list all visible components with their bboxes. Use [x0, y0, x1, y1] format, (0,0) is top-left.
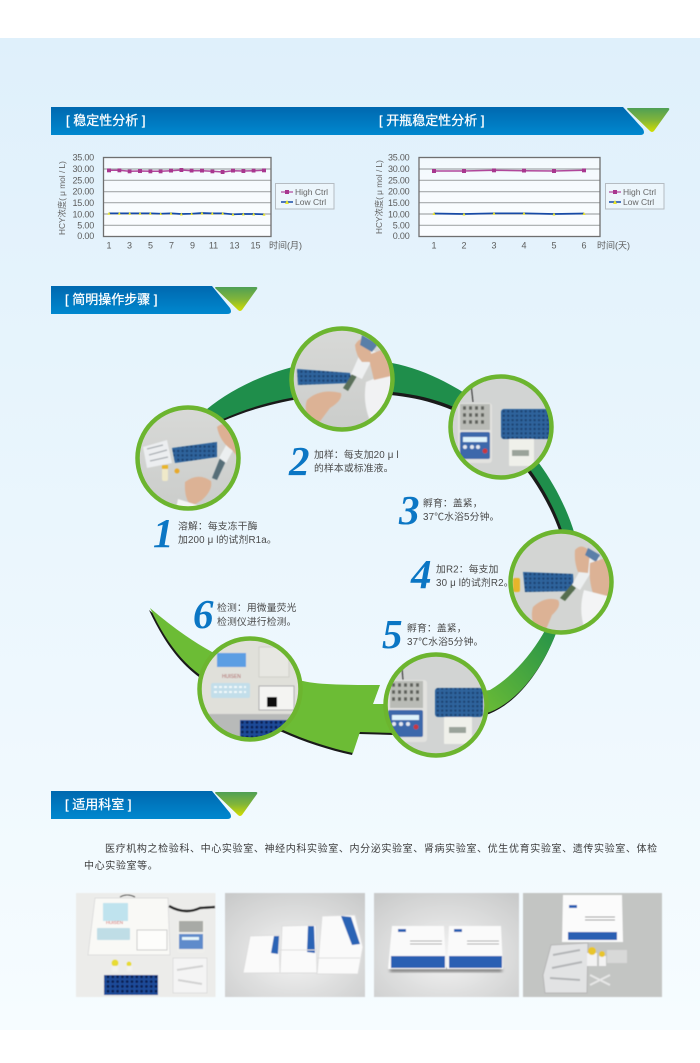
chart: opened-vial stability over days: 5.00 [393, 220, 410, 230]
chart: stability over months: 13 [229, 240, 240, 250]
chart: opened-vial stability over days: 30.00 [388, 164, 410, 174]
chart: stability over months [57, 152, 334, 250]
product photo: kit boxes front [374, 893, 519, 997]
step 1 text: 加200 μ l的试剂R1a。 [178, 533, 277, 546]
legend [606, 184, 664, 209]
chart: opened-vial stability over days: 1 [431, 240, 437, 250]
chart: stability over months: 时间(月) [269, 240, 302, 250]
chart: opened-vial stability over days: HCY浓度( μ mol / L) [374, 160, 384, 234]
step 4 text: 加R2：每支加 [436, 562, 499, 576]
product photo: instrument set: HUISEN [106, 920, 123, 925]
departments paragraph: 中心实验室等。 [84, 859, 158, 872]
chart: stability over months: 1 [106, 240, 112, 250]
chart: opened-vial stability over days: 4 [521, 240, 527, 250]
photo circle: step 5 incubation [386, 654, 486, 756]
section header: stability analysis: [ 稳定性分析 ] [66, 113, 145, 128]
departments paragraph: 医疗机构之检验科、中心实验室、神经内科实验室、内分泌实验室、肾病实验室、优生优育实验室、遗传实验室、体检 [105, 842, 658, 855]
legend: High Ctrl [295, 187, 328, 197]
icon: triangle accent [627, 108, 669, 132]
product photo: instrument set [76, 893, 216, 997]
chart: opened-vial stability over days: 25.00 [388, 176, 410, 186]
chart: stability over months: 3 [127, 240, 132, 250]
section header: applicable departments [51, 791, 257, 819]
icon: triangle accent [215, 792, 257, 816]
chart: stability over months: 10.00 [72, 210, 94, 220]
product photo: kit contents [523, 893, 662, 997]
step 4 text [410, 551, 514, 597]
step 3 text [398, 487, 499, 533]
chart: opened-vial stability over days: 15.00 [388, 198, 410, 208]
step 2 text: 的样本或标准液。 [314, 462, 394, 474]
legend: Low Ctrl [295, 197, 326, 207]
chart: stability over months: 30.00 [72, 164, 94, 174]
chart: opened-vial stability over days: 2 [461, 240, 467, 250]
step 3 text: 孵育：盖紧， [423, 496, 483, 510]
chart: opened-vial stability over days: 5 [551, 240, 557, 250]
legend: Low Ctrl [623, 197, 654, 207]
chart: stability over months: 15 [250, 240, 261, 250]
step 4 text: 4 [410, 551, 432, 597]
step 2 text: 加样：每支加20 μ l [314, 448, 399, 461]
chart: stability over months: 11 [209, 240, 218, 250]
step 5 text: 37℃水浴5分钟。 [407, 635, 483, 648]
section header: stability analysis: [ 开瓶稳定性分析 ] [379, 113, 484, 128]
legend: High Ctrl [623, 187, 656, 197]
step 1 text: 1 [153, 510, 174, 556]
chart: opened-vial stability over days: 35.00 [388, 152, 410, 162]
step 2 text [288, 438, 399, 484]
chart: opened-vial stability over days: 10.00 [388, 210, 410, 220]
chart: opened-vial stability over days: 6 [581, 240, 587, 250]
section header: simple procedure: [ 简明操作步骤 ] [65, 292, 157, 307]
step 6 text: 检测：用微量荧光 [217, 601, 297, 614]
chart: opened-vial stability over days: 0.00 [393, 231, 410, 241]
photo circle: step 6 detection instrument [195, 638, 305, 744]
chart: opened-vial stability over days: 20.00 [388, 186, 410, 196]
product photo: stacked kit boxes [225, 893, 365, 997]
step 6 text: 检测仪进行检测。 [217, 615, 297, 628]
step 5 text [382, 611, 483, 657]
step 1 text [153, 510, 277, 556]
photo circle: step 3 incubation [450, 375, 552, 478]
step 3 text: 3 [398, 487, 420, 533]
chart: opened-vial stability over days: 时间(天) [597, 240, 630, 250]
step 3 text: 37℃水浴5分钟。 [423, 510, 499, 523]
chart: stability over months: 5 [148, 240, 153, 250]
photo circle: step 6 detection instrument: HUISEN [222, 674, 241, 680]
chart: opened-vial stability over days [374, 152, 664, 250]
photo circle: step 4 adding R2 [510, 532, 615, 632]
step 1 text: 溶解：每支冻干酶 [178, 520, 258, 532]
step 5 text: 5 [382, 611, 402, 657]
chart: stability over months: 35.00 [72, 152, 94, 162]
section header: simple procedure [51, 286, 257, 314]
section header: applicable departments: [ 适用科室 ] [65, 797, 131, 812]
chart: stability over months: 15.00 [72, 198, 94, 208]
legend [276, 184, 334, 209]
photo circle: step 2 sampling [292, 328, 395, 430]
step 6 text: 6 [193, 591, 214, 637]
chart: stability over months: 0.00 [77, 231, 94, 241]
process ring arrow [149, 359, 575, 755]
departments paragraph [84, 842, 658, 872]
section header: stability analysis [51, 107, 669, 135]
chart: stability over months: 5.00 [77, 220, 94, 230]
chart: stability over months: 20.00 [72, 186, 94, 196]
chart: stability over months: 9 [190, 240, 195, 250]
chart: stability over months: 25.00 [72, 176, 94, 186]
step 5 text: 孵育：盖紧， [407, 622, 467, 634]
chart: stability over months: 7 [169, 240, 174, 250]
step 4 text: 30 μ l的试剂R2。 [436, 576, 514, 589]
icon: triangle accent [215, 287, 257, 311]
chart: stability over months: HCY浓度( μ mol / L) [57, 161, 67, 235]
step 2 text: 2 [288, 438, 310, 484]
photo circle: step 1 dissolving [138, 408, 240, 512]
step 6 text [193, 591, 297, 637]
chart: opened-vial stability over days: 3 [491, 240, 497, 250]
